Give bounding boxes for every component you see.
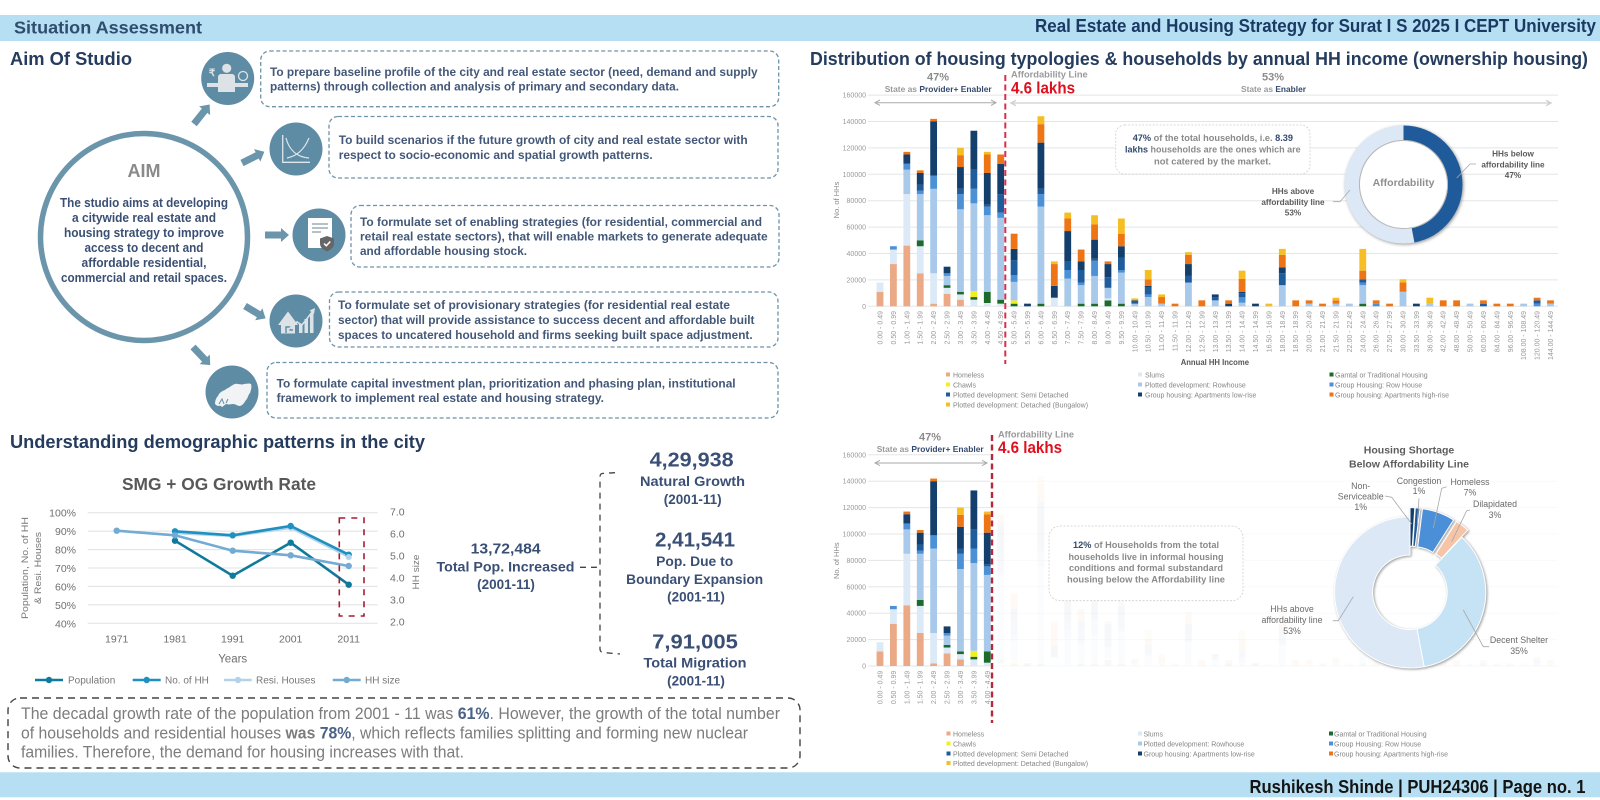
chart 1: stacked bars of housing typologies by income: 144.00 - 144.49 xyxy=(1548,311,1555,360)
chart 1: stacked bars of housing typologies by income: 0 xyxy=(862,304,866,311)
chart 1 affordability band labels: State as Provider+ Enabler xyxy=(885,84,992,94)
aim circle: housing strategy to improve xyxy=(64,226,224,240)
objective box 4 xyxy=(330,292,778,347)
icon: person balancing money and time xyxy=(201,52,254,105)
aim circle: The studio aims at developing xyxy=(60,196,228,210)
chart 1 donut: affordability: 53% xyxy=(1285,209,1302,218)
chart 1: stacked bars of housing typologies by income: 40000 xyxy=(847,251,866,258)
chart 2 legend: Group housing: Apartments low-rise xyxy=(1144,752,1255,758)
chart 2 donut: housing shortage: Congestion xyxy=(1397,476,1441,486)
line chart: SMG + OG growth rate: 40% xyxy=(55,618,76,630)
chart 2 donut: housing shortage: Decent Shelter xyxy=(1490,635,1548,645)
aim circle: a citywide real estate and xyxy=(72,211,216,225)
chart 1 affordability line xyxy=(1005,70,1088,364)
chart 1 legend xyxy=(946,372,1449,410)
chart 1: stacked bars of housing typologies by income: 10.00 - 10.49 xyxy=(1132,311,1139,352)
chart 1: stacked bars of housing typologies by income: 1.00 - 1.49 xyxy=(904,311,911,344)
chart 2 donut: housing shortage: 3% xyxy=(1489,510,1502,520)
chart 1: stacked bars of housing typologies by income: 3.00 - 3.49 xyxy=(958,311,965,344)
chart 1: stacked bars of housing typologies by income: 20.00 - 20.49 xyxy=(1307,311,1314,352)
objective box 4: To formulate set of provisionary strategies (for residential real estate xyxy=(338,298,730,312)
chart 1: stacked bars of housing typologies by income: 3.50 - 3.99 xyxy=(971,311,978,344)
chart 1: stacked bars of housing typologies by income: 18.50 - 18.99 xyxy=(1293,311,1300,352)
callout: decadal growth note: The decadal growth rate of the population from 2001 - 11 was 61%. However, the growth of the total number xyxy=(21,705,780,723)
objective box 2: respect to socio-economic and spatial growth patterns. xyxy=(339,148,653,162)
stat: total population increased xyxy=(436,541,574,592)
chart 2 affordability line xyxy=(992,430,1074,723)
chart 1: stacked bars of housing typologies by income: 5.00 - 5.49 xyxy=(1012,311,1019,344)
icon: person balancing money and time: ₹ xyxy=(209,68,216,79)
line chart: SMG + OG growth rate: SMG + OG Growth Rate xyxy=(122,474,316,494)
line chart: SMG + OG growth rate: 70% xyxy=(55,563,76,575)
objective box 3 xyxy=(351,206,779,267)
chart 1: stacked bars of housing typologies by income: 60000 xyxy=(847,225,866,232)
line chart: SMG + OG growth rate: HH size xyxy=(411,554,422,590)
objective box 5: To formulate capital investment plan, prioritization and phasing plan, institutional xyxy=(277,377,736,391)
chart 1: stacked bars of housing typologies by income: 2.00 - 2.49 xyxy=(931,311,938,344)
line chart: SMG + OG growth rate xyxy=(20,474,422,666)
heading: demographic patterns: Understanding demographic patterns in the city xyxy=(10,432,425,452)
line chart legend: Resi. Houses xyxy=(256,676,315,686)
chart 1: stacked bars of housing typologies by income: 13.00 - 13.49 xyxy=(1213,311,1220,352)
chart 1 legend: Group Housing: Row House xyxy=(1335,382,1422,390)
stat: total population increased: 13,72,484 xyxy=(471,541,541,557)
chart 1: stacked bars of housing typologies by income: 6.50 - 6.99 xyxy=(1052,311,1059,344)
chart 1: stacked bars of housing typologies by income: 42.00 - 42.49 xyxy=(1441,311,1448,352)
chart 2: stacked bars below affordability line: 3.00 - 3.49 xyxy=(958,671,965,704)
chart 2: stacked bars below affordability line: 20000 xyxy=(847,637,866,644)
line chart: SMG + OG growth rate: 5.0 xyxy=(390,551,405,563)
chart 2: stacked bars below affordability line: 40000 xyxy=(847,611,866,618)
objective box 4: sector) that will provide assistance to success decent and affordable built xyxy=(338,313,754,327)
chart 1: stacked bars of housing typologies by income xyxy=(832,93,1558,367)
icon: crossing curves chart xyxy=(270,122,322,176)
chart 1: stacked bars of housing typologies by income: 96.00 - 96.49 xyxy=(1508,311,1515,352)
chart 2: stacked bars below affordability line: 4.00 - 4.49 xyxy=(985,671,992,704)
stat: natural growth: Natural Growth xyxy=(640,474,745,489)
line chart: SMG + OG growth rate: Years xyxy=(218,654,247,666)
line chart: SMG + OG growth rate: & Resi. Houses xyxy=(33,532,44,604)
chart 1: stacked bars of housing typologies by income: 100000 xyxy=(843,172,866,179)
chart 1: stacked bars of housing typologies by income: 0.50 - 0.99 xyxy=(891,311,898,344)
callout: decadal growth note xyxy=(8,698,800,768)
callout: decadal growth note: of households and residential houses was 78%, which reflects families splitting and forming new nuclear xyxy=(21,724,748,742)
chart 1 legend: Chawls xyxy=(953,382,976,390)
chart 1: stacked bars of housing typologies by income: 18.00 - 18.49 xyxy=(1280,311,1287,352)
chart 1 legend: Group housing: Apartments low-rise xyxy=(1145,392,1256,400)
chart 2 donut: housing shortage: Non- xyxy=(1351,481,1370,491)
chart 2 legend: Slums xyxy=(1144,732,1163,738)
chart 1: stacked bars of housing typologies by income: 80000 xyxy=(847,198,866,205)
chart 2 donut: housing shortage: Serviceable xyxy=(1338,491,1384,501)
chart 2 callout: housing below the Affordability line xyxy=(1067,575,1225,585)
chart 2 donut: housing shortage: affordability line xyxy=(1262,615,1323,625)
stat: total migration: (2001-11) xyxy=(667,674,725,689)
chart 1: stacked bars of housing typologies by income: 20000 xyxy=(847,277,866,284)
chart 1: stacked bars of housing typologies by income: 7.50 - 7.99 xyxy=(1079,311,1086,344)
chart 2: stacked bars below affordability line: 140000 xyxy=(843,479,866,486)
line chart: SMG + OG growth rate: 1981 xyxy=(163,633,187,645)
line chart legend: HH size xyxy=(365,676,400,686)
line chart: SMG + OG growth rate: 2011 xyxy=(337,633,360,645)
chart 2 donut: housing shortage: 1% xyxy=(1413,486,1426,496)
objective box 4: spaces to uncatered household and firms seeking built space adjustment. xyxy=(338,328,753,342)
chart 1: stacked bars of housing typologies by income: 21.00 - 21.49 xyxy=(1320,311,1327,352)
chart 2: stacked bars below affordability line: 1.00 - 1.49 xyxy=(904,671,911,704)
line chart: SMG + OG growth rate: 50% xyxy=(55,600,76,612)
header bar: Situation Assessment xyxy=(14,17,202,37)
chart 1 legend: Slums xyxy=(1145,372,1165,380)
chart 2 donut: housing shortage: Housing Shortage xyxy=(1364,444,1454,456)
chart 1 affordability line: Affordability Line xyxy=(1011,70,1088,80)
line chart: SMG + OG growth rate: 3.0 xyxy=(390,595,405,607)
line chart: SMG + OG growth rate: 60% xyxy=(55,581,76,593)
chart 1 affordability line: 4.6 lakhs xyxy=(1011,79,1075,97)
chart 2 donut: housing shortage: 1% xyxy=(1354,502,1367,512)
arrow 1 xyxy=(189,100,215,128)
chart 2 affordability line: 4.6 lakhs xyxy=(998,439,1062,457)
chart 1: stacked bars of housing typologies by income: 33.50 - 33.99 xyxy=(1414,311,1421,352)
objective box 5: framework to implement real estate and housing strategy. xyxy=(277,391,604,405)
objective box 2: To build scenarios if the future growth of city and real estate sector with xyxy=(339,133,748,147)
chart 1 legend: Homeless xyxy=(953,372,985,380)
chart 1: stacked bars of housing typologies by income: 120.00 - 120.49 xyxy=(1535,311,1542,360)
chart 1: stacked bars of housing typologies by income: 13.50 - 13.99 xyxy=(1226,311,1233,352)
objective box 3: and affordable housing stock. xyxy=(360,244,527,258)
arrow 4 xyxy=(241,300,269,324)
chart 1: stacked bars of housing typologies by income: 14.00 - 14.49 xyxy=(1240,311,1247,352)
objective box 1: To prepare baseline profile of the city and real estate sector (need, demand and supply xyxy=(270,65,758,79)
chart 2 donut: housing shortage: Dilapidated xyxy=(1473,499,1517,509)
heading: distribution of housing typologies: Distribution of housing typologies & households by annual HH income (ownership housing) xyxy=(810,48,1588,69)
aim circle xyxy=(40,134,248,340)
chart 1 donut: affordability: affordability line xyxy=(1261,198,1325,207)
line chart: SMG + OG growth rate: 1991 xyxy=(221,633,245,645)
chart 2 donut: housing shortage xyxy=(1262,444,1548,668)
chart 1: stacked bars of housing typologies by income: 9.50 - 9.99 xyxy=(1119,311,1126,344)
chart 1 legend: Group housing: Apartments high-rise xyxy=(1335,392,1449,400)
icon: document with shield xyxy=(292,208,346,262)
chart 1: stacked bars of housing typologies by income: 84.00 - 84.49 xyxy=(1494,311,1501,352)
chart 1 donut: affordability: HHs above xyxy=(1272,187,1315,196)
aim circle: affordable residential, xyxy=(82,256,206,270)
stat: boundary expansion: (2001-11) xyxy=(667,590,725,605)
chart 2: stacked bars below affordability line: 0.00 - 0.49 xyxy=(878,671,884,704)
chart 2 affordability line: Affordability Line xyxy=(998,430,1074,440)
chart 2: stacked bars below affordability line: 100000 xyxy=(843,532,866,538)
arrow 5 xyxy=(188,342,215,370)
chart 1: stacked bars of housing typologies by income: 120000 xyxy=(843,145,866,152)
chart 1: stacked bars of housing typologies by income: 30.00 - 30.49 xyxy=(1400,311,1408,352)
chart 1 callout: not catered by the market. xyxy=(1154,156,1271,166)
line chart: SMG + OG growth rate: 2.0 xyxy=(390,617,405,629)
stat: total migration: Total Migration xyxy=(644,656,746,671)
footer bar xyxy=(0,772,1600,797)
chart 2 legend: Gamtal or Traditional Housing xyxy=(1334,732,1427,738)
chart 1: stacked bars of housing typologies by income: 9.00 - 9.49 xyxy=(1106,311,1112,344)
stat: boundary expansion xyxy=(626,530,763,605)
objective box 1: patterns) through collection and analysis of primary and secondary data. xyxy=(270,80,679,94)
chart 1 legend: Plotted development: Semi Detached xyxy=(953,392,1069,400)
chart 1: stacked bars of housing typologies by income: 16.50 - 16.99 xyxy=(1266,311,1273,352)
chart 2 donut: housing shortage: Homeless xyxy=(1450,477,1490,487)
chart 2 callout: 12% of Households from the total xyxy=(1073,540,1219,550)
chart 1: stacked bars of housing typologies by income: 21.50 - 21.99 xyxy=(1333,311,1340,352)
chart 1: stacked bars of housing typologies by income: No. of HHs xyxy=(832,181,841,218)
chart 1: stacked bars of housing typologies by income: 48.00 - 48.49 xyxy=(1454,311,1461,352)
chart 2 callout: households live in informal housing xyxy=(1068,552,1224,562)
chart 2 affordability band labels: State as Provider+ Enabler xyxy=(877,444,984,454)
chart 1 callout xyxy=(1116,125,1310,174)
chart 1: stacked bars of housing typologies by income: 26.00 - 26.49 xyxy=(1374,311,1381,352)
objective box 3: To formulate set of enabling strategies (for residential, commercial and xyxy=(360,215,762,229)
chart 2 callout: conditions and formal substandard xyxy=(1069,563,1223,573)
chart 1: stacked bars of housing typologies by income: Annual HH Income xyxy=(1181,358,1250,367)
chart 2: stacked bars below affordability line: 0 xyxy=(862,664,866,670)
chart 2 affordability band labels: 47% xyxy=(919,432,941,444)
chart 1: stacked bars of housing typologies by income: 108.00 - 108.49 xyxy=(1521,311,1528,360)
stat: total population increased: (2001-11) xyxy=(477,577,535,592)
chart 2: stacked bars below affordability line: 2.50 - 2.99 xyxy=(945,671,952,704)
chart 1: stacked bars of housing typologies by income: 5.50 - 5.99 xyxy=(1025,311,1032,344)
chart 1 affordability band labels xyxy=(875,72,1551,106)
line chart: SMG + OG growth rate: 4.0 xyxy=(390,573,405,585)
stat: natural growth xyxy=(640,450,745,507)
chart 2 legend: Homeless xyxy=(953,732,985,738)
chart 1: stacked bars of housing typologies by income: 8.00 - 8.49 xyxy=(1092,311,1099,344)
chart 2 legend: Group Housing: Row House xyxy=(1334,742,1421,748)
chart 1 legend: Gamtal or Traditional Housing xyxy=(1335,372,1428,380)
line chart legend: Population xyxy=(68,676,115,686)
chart 1: stacked bars of housing typologies by income: 10.50 - 10.99 xyxy=(1146,311,1153,352)
chart 2 donut: housing shortage: HHs above xyxy=(1270,604,1314,614)
chart 1 donut: affordability xyxy=(1261,133,1545,236)
line chart: SMG + OG growth rate: 80% xyxy=(55,544,76,556)
chart 1 affordability band labels: 53% xyxy=(1262,72,1284,84)
chart 1: stacked bars of housing typologies by income: 14.50 - 14.99 xyxy=(1253,311,1260,352)
chart 2: stacked bars below affordability line: 3.50 - 3.99 xyxy=(971,671,978,704)
chart 1: stacked bars of housing typologies by income: 22.00 - 22.49 xyxy=(1347,311,1354,352)
chart 2 legend: Plotted development: Semi Detached xyxy=(953,752,1069,758)
line chart: SMG + OG growth rate: 1971 xyxy=(105,633,129,645)
line chart: SMG + OG growth rate: 7.0 xyxy=(390,507,405,519)
line chart: SMG + OG growth rate: 100% xyxy=(49,508,76,520)
stat: boundary expansion: 2,41,541 xyxy=(655,530,735,552)
objective box 1 xyxy=(261,51,779,107)
line chart: SMG + OG growth rate: 2001 xyxy=(279,633,303,645)
chart 1 donut: affordability: HHs below xyxy=(1492,150,1535,159)
chart 1: stacked bars of housing typologies by income: 12.50 - 12.99 xyxy=(1199,311,1206,352)
objective box 2 xyxy=(329,116,778,178)
chart 1 affordability band labels: 47% xyxy=(927,72,949,84)
chart 2: stacked bars below affordability line: 80000 xyxy=(847,558,866,565)
chart 1 donut: affordability: 47% xyxy=(1505,171,1522,180)
chart 1 callout: lakhs households are the ones which are xyxy=(1125,145,1301,155)
chart 1: stacked bars of housing typologies by income: 11.00 - 11.49 xyxy=(1159,311,1166,351)
arrow 2 xyxy=(239,146,267,169)
chart 1 affordability band labels: State as Enabler xyxy=(1241,84,1307,94)
objective box 3: retail real estate sectors), that will enable markets to generate adequate xyxy=(360,230,768,244)
line chart legend xyxy=(35,676,400,686)
chart 2 legend: Group housing: Apartments high-rise xyxy=(1334,752,1448,758)
chart 2: stacked bars below affordability line: 160000 xyxy=(843,452,866,459)
header bar xyxy=(0,15,1600,41)
chart 1: stacked bars of housing typologies by income: 27.50 - 27.99 xyxy=(1387,311,1394,352)
objective box 5 xyxy=(267,362,778,418)
icon: house with rising arrow xyxy=(270,294,322,348)
aim circle: access to decent and xyxy=(84,241,204,255)
chart 1: stacked bars of housing typologies by income: 0.00 - 0.49 xyxy=(878,311,884,344)
aim circle: commercial and retail spaces. xyxy=(61,271,227,285)
chart 1: stacked bars of housing typologies by income: 2.50 - 2.99 xyxy=(945,311,952,344)
chart 1 legend: Plotted development: Detached (Bungalow) xyxy=(953,402,1088,410)
chart 1: stacked bars of housing typologies by income: 50.00 - 50.49 xyxy=(1468,311,1474,352)
heading: aim of studio: Aim Of Studio xyxy=(10,48,132,69)
stat: total migration xyxy=(644,631,746,689)
chart 1: stacked bars of housing typologies by income: 6.00 - 6.49 xyxy=(1038,311,1045,344)
stat: natural growth: 4,29,938 xyxy=(650,450,734,472)
stat: boundary expansion: Pop. Due to xyxy=(656,554,733,569)
icon: city map xyxy=(206,366,258,418)
arrow 3 xyxy=(265,228,289,242)
line chart: SMG + OG growth rate: 90% xyxy=(55,526,76,538)
chart 2: stacked bars below affordability line: 1.50 - 1.99 xyxy=(918,671,925,704)
chart 2: stacked bars below affordability line: 0.50 - 0.99 xyxy=(891,671,898,704)
line chart legend: No. of HH xyxy=(165,676,209,686)
chart 2: stacked bars below affordability line: 60000 xyxy=(847,584,866,591)
chart 2: stacked bars below affordability line: No. of HHs xyxy=(832,542,841,579)
chart 2 donut: housing shortage: Below Affordability Line xyxy=(1349,458,1469,470)
chart 2 legend xyxy=(946,732,1448,768)
chart 1: stacked bars of housing typologies by income: 7.00 - 7.49 xyxy=(1065,311,1072,344)
chart 1 callout: 47% of the total households, i.e. 8.39 xyxy=(1133,133,1293,143)
chart 1: stacked bars of housing typologies by income: 160000 xyxy=(843,93,866,100)
chart 1: stacked bars of housing typologies by income: 11.50 - 11.99 xyxy=(1172,311,1180,351)
stat: boundary expansion: Boundary Expansion xyxy=(626,572,763,587)
chart 1: stacked bars of housing typologies by income: 12.00 - 12.49 xyxy=(1186,311,1193,352)
chart 2 donut: housing shortage: 7% xyxy=(1464,488,1477,498)
chart 2: stacked bars below affordability line: 2.00 - 2.49 xyxy=(931,671,938,704)
chart 2 legend: Plotted development: Rowhouse xyxy=(1144,742,1244,748)
callout: decadal growth note: families. Therefore, the demand for housing increases with that. xyxy=(21,744,464,762)
chart 2 legend: Chawls xyxy=(953,742,976,748)
chart 2 callout xyxy=(1049,526,1243,601)
aim circle: AIM xyxy=(128,161,160,181)
line chart: SMG + OG growth rate: 6.0 xyxy=(390,529,405,541)
chart 1: stacked bars of housing typologies by income: 36.00 - 36.49 xyxy=(1427,311,1434,352)
chart 1: stacked bars of housing typologies by income: 4.50 - 4.99 xyxy=(998,311,1005,344)
chart 1 donut: affordability: affordability line xyxy=(1481,161,1545,170)
chart 2: stacked bars below affordability line: 120000 xyxy=(843,505,866,512)
chart 2: stacked bars below affordability line xyxy=(832,452,1558,704)
chart 1: stacked bars of housing typologies by income: 4.00 - 4.49 xyxy=(985,311,992,344)
chart 2 donut: housing shortage: 53% xyxy=(1283,626,1301,636)
chart 1: stacked bars of housing typologies by income: 1.50 - 1.99 xyxy=(918,311,925,344)
chart 1 legend: Plotted development: Rowhouse xyxy=(1145,382,1246,390)
chart 1: stacked bars of housing typologies by income: 140000 xyxy=(843,119,866,126)
line chart: SMG + OG growth rate: Population, No. of HH xyxy=(20,517,31,619)
chart 2 donut: housing shortage: 35% xyxy=(1510,646,1528,656)
chart 1: stacked bars of housing typologies by income: 60.00 - 60.49 xyxy=(1481,311,1488,352)
chart 1: stacked bars of housing typologies by income: 24.00 - 24.49 xyxy=(1360,311,1367,352)
chart 2 affordability band labels xyxy=(875,432,987,466)
bracket connector xyxy=(580,473,620,654)
chart 1 donut: affordability: Affordability xyxy=(1373,177,1435,189)
chart 2 legend: Plotted development: Detached (Bungalow) xyxy=(953,761,1088,768)
stat: total population increased: Total Pop. Increased xyxy=(436,560,574,575)
stat: natural growth: (2001-11) xyxy=(664,492,722,507)
stat: total migration: 7,91,005 xyxy=(652,631,738,653)
